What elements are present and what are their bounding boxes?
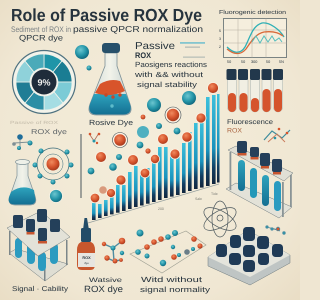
test tubes: red row <box>226 69 283 112</box>
bottle: ROX dye: dye <box>84 261 89 265</box>
label: Watsive ROX dye <box>84 277 123 294</box>
label: With without signal normality: signal normality <box>140 285 210 294</box>
flask: passive ROX <box>89 43 131 115</box>
subtitle <box>11 24 203 34</box>
bottle: ROX dye <box>77 218 95 270</box>
label: Watsive ROX dye: ROX dye <box>84 284 123 294</box>
chart baseline and ticks: Tide <box>211 192 218 196</box>
label: With without signal normality: Witd without <box>141 275 203 284</box>
title: Role of Passive ROX Dye <box>11 5 202 25</box>
line chart: fluorogenic detection: 5 <box>219 29 221 33</box>
bar chart <box>92 94 220 220</box>
line chart: fluorogenic detection: 50 <box>227 60 231 64</box>
donut gauge: 9%: 9% <box>37 78 51 88</box>
line chart: fluorogenic detection: 2 <box>219 45 221 49</box>
label: Fluorescence ROX <box>227 119 273 134</box>
vertical axis line <box>80 134 82 198</box>
label: With without signal normality <box>140 275 210 294</box>
chart baseline and ticks <box>88 184 219 223</box>
small molecule: near axis <box>89 133 100 144</box>
blue flask <box>9 160 36 205</box>
label: Fluorescence ROX: Fluorescence <box>227 119 273 126</box>
chart baseline and ticks: Sale <box>195 197 202 201</box>
small molecule: top of plate <box>266 226 285 234</box>
line chart: fluorogenic detection: 3 <box>219 37 221 41</box>
label: Signal stability: Signal · Cability <box>12 285 69 293</box>
label: Passive ROX panel: signal stability <box>137 80 197 89</box>
line chart: fluorogenic detection: Fluorogenic detection <box>219 9 286 16</box>
molecules: red spheres <box>90 82 218 203</box>
label: Fluorescence ROX: ROX <box>227 128 243 134</box>
chart baseline and ticks: 200 <box>158 207 164 211</box>
donut gauge: 9% <box>12 50 76 114</box>
line chart: fluorogenic detection: 50 <box>241 60 245 64</box>
label: Passive ROX panel: Paosigens reactions <box>135 60 207 69</box>
plate: vial block <box>208 227 290 285</box>
bottle: ROX dye: ROX <box>82 256 91 260</box>
faded label: ROX dye: Passive of ROX <box>10 120 58 125</box>
faded label: ROX dye <box>10 120 67 136</box>
label: Passive ROX panel: Passive <box>135 41 175 52</box>
label: Passive ROX panel <box>134 41 207 89</box>
molecule: left cluster <box>12 134 32 150</box>
label: Passive ROX panel: with && without <box>134 70 204 79</box>
label: Watsive ROX dye: Watsive <box>89 277 123 284</box>
atom: red nucleus with orbit <box>32 148 74 184</box>
test tube rack: right <box>226 141 293 218</box>
line chart: fluorogenic detection: 5N <box>279 60 284 64</box>
line chart: fluorogenic detection: 300 <box>251 60 257 64</box>
molecules: teal spheres <box>75 45 196 174</box>
faded label: ROX dye: ROX dye <box>31 128 67 136</box>
subheading: QPCR dye: QPCR dye <box>19 34 64 42</box>
subtitle: Sediment of ROX in <box>11 25 71 34</box>
teal sphere <box>50 190 62 202</box>
molecular network <box>130 230 206 273</box>
subtitle: passive QPCR normalization <box>73 24 203 34</box>
small DNA molecule <box>264 128 290 142</box>
line chart: fluorogenic detection: 50 <box>266 60 270 64</box>
label: Passive ROX panel: ROX <box>135 51 152 60</box>
line chart: fluorogenic detection <box>219 9 286 64</box>
label: Rosive Dye: Rosive Dye <box>89 118 133 127</box>
molecule: branched <box>102 238 125 264</box>
test tube rack: left <box>7 209 70 281</box>
atom icon <box>200 201 240 237</box>
